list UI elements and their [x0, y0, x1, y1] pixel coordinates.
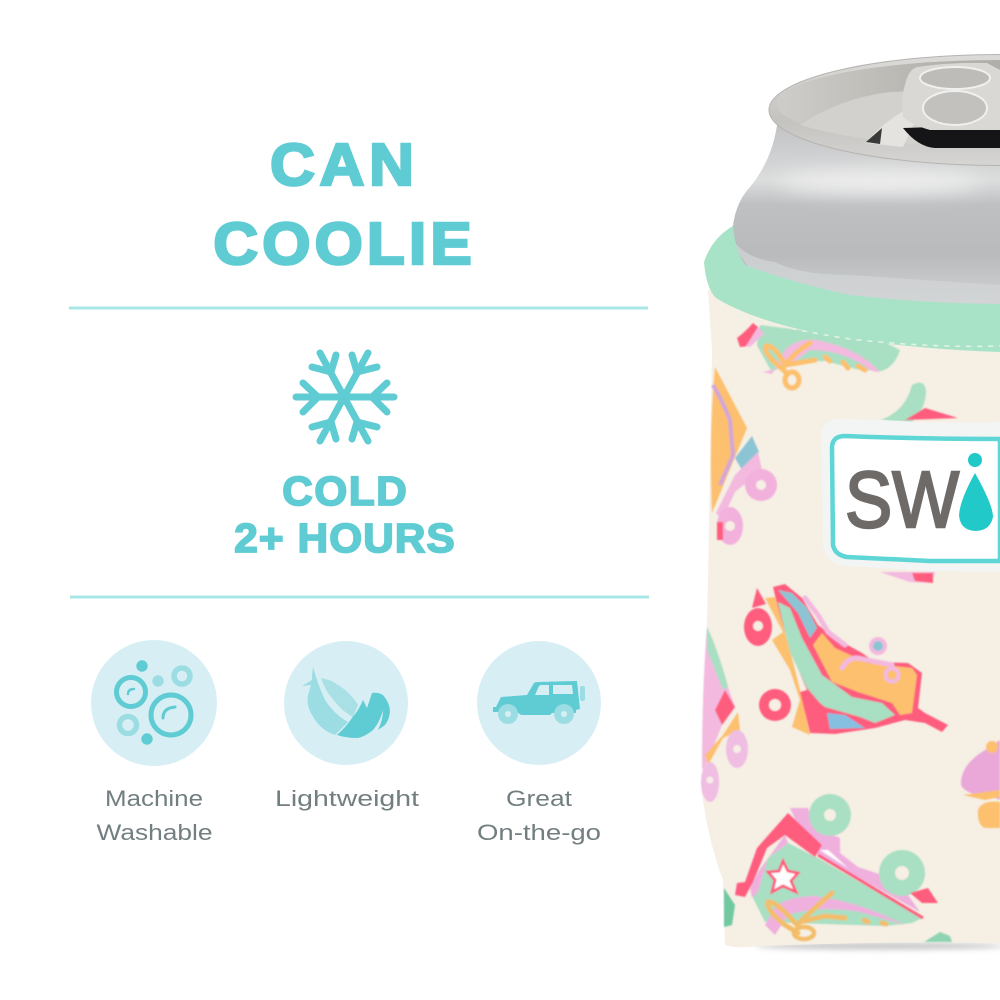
skate: centre pink — [744, 584, 948, 735]
mint collar — [704, 226, 1000, 352]
skate: behind patch — [880, 383, 958, 583]
cold rating heading — [234, 468, 455, 561]
skate: top — [737, 323, 900, 388]
aluminium can — [732, 54, 1000, 310]
skate: left lower partial — [701, 627, 748, 802]
feature labels — [96, 786, 601, 845]
product photo: can coolie — [701, 54, 1000, 950]
brand name: SW — [845, 455, 959, 544]
brand patch — [821, 419, 1000, 572]
feature labels: Washable — [96, 820, 212, 845]
title — [213, 131, 472, 277]
title: CAN — [270, 131, 414, 198]
skate: right partial — [961, 740, 1000, 828]
feature labels: Machine — [105, 786, 203, 811]
cold rating heading: COLD — [282, 468, 407, 514]
skate: lower — [724, 794, 952, 942]
feature labels: On-the-go — [477, 820, 601, 845]
icon: water drop — [959, 473, 993, 531]
feature labels: Lightweight — [275, 786, 419, 811]
title: COOLIE — [213, 210, 472, 277]
cold rating heading: 2+ HOURS — [234, 515, 455, 561]
skate: left partial — [711, 367, 777, 545]
icon: lightweight feather — [284, 641, 408, 765]
icon: snowflake — [296, 353, 394, 441]
icon: machine washable bubbles — [91, 640, 217, 766]
feature labels: Great — [506, 786, 572, 811]
icon: great on-the-go jeep — [477, 641, 601, 765]
coolie fabric body — [702, 290, 1000, 947]
